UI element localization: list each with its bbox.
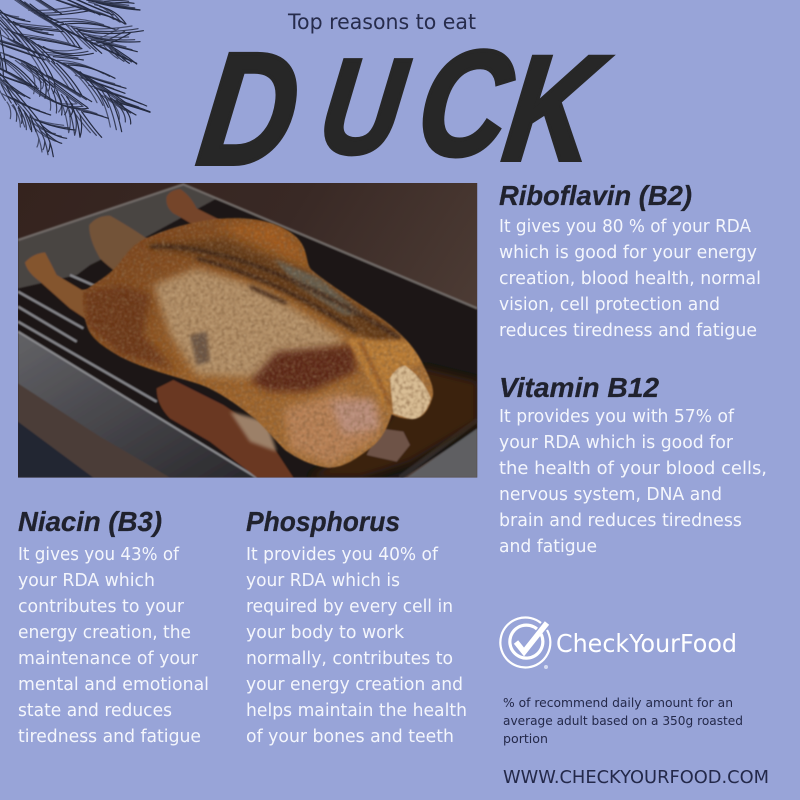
footnote: average adult based on a 350g roasted bbox=[503, 713, 743, 728]
footnote: portion bbox=[503, 731, 548, 746]
text block: energy creation, the bbox=[18, 623, 191, 643]
website url: WWW.CHECKYOURFOOD.COM bbox=[503, 767, 769, 788]
text block: creation, blood health, normal bbox=[499, 269, 761, 289]
text block: of your bones and teeth bbox=[246, 727, 454, 747]
title: DUCK: C bbox=[409, 20, 523, 188]
lower leg bbox=[157, 380, 293, 478]
text block: which is good for your energy bbox=[499, 243, 757, 263]
text block: your RDA which is bbox=[246, 571, 400, 591]
panel: Phosphorus bbox=[246, 506, 467, 747]
text block bbox=[246, 545, 467, 747]
text block: tiredness and fatigue bbox=[18, 727, 201, 747]
roasting tray bbox=[18, 184, 477, 478]
photo: roast duck in tray bbox=[18, 183, 477, 478]
text block: required by every cell in bbox=[246, 597, 453, 617]
heading: Riboflavin (B2) bbox=[499, 180, 692, 211]
text block: contributes to your bbox=[18, 597, 185, 617]
text block: normally, contributes to bbox=[246, 649, 453, 669]
wing left bbox=[89, 216, 147, 275]
text block: your body to work bbox=[246, 623, 405, 643]
text block: vision, cell protection and bbox=[499, 295, 720, 315]
duck body bbox=[77, 215, 440, 475]
text block bbox=[499, 407, 767, 557]
text block: It gives you 43% of bbox=[18, 545, 180, 565]
brand name: CheckYourFood bbox=[556, 629, 737, 658]
footnote bbox=[503, 695, 743, 746]
text block: your RDA which bbox=[18, 571, 155, 591]
heading: Vitamin B12 bbox=[499, 372, 659, 403]
rack bars bbox=[18, 275, 157, 402]
text block: reduces tiredness and fatigue bbox=[499, 321, 757, 341]
text block: brain and reduces tiredness bbox=[499, 511, 742, 531]
decoration: rosemary sprig bbox=[0, 0, 150, 157]
text block: your energy creation and bbox=[246, 675, 463, 695]
text block: helps maintain the health bbox=[246, 701, 467, 721]
text block: the health of your blood cells, bbox=[499, 459, 767, 479]
text block: mental and emotional bbox=[18, 675, 209, 695]
text block: your RDA which is good for bbox=[499, 433, 734, 453]
text block bbox=[499, 217, 761, 341]
title: DUCK: D bbox=[190, 20, 310, 199]
subtitle: Top reasons to eat bbox=[287, 10, 476, 34]
panel: Vitamin B12 bbox=[499, 372, 767, 557]
text block bbox=[18, 545, 209, 747]
panel: Niacin (B3) bbox=[18, 506, 209, 747]
heading: Niacin (B3) bbox=[18, 506, 162, 537]
heading: Phosphorus bbox=[246, 506, 400, 537]
footnote: % of recommend daily amount for an bbox=[503, 695, 733, 710]
panel: Riboflavin (B2) bbox=[499, 180, 761, 341]
title: DUCK: U bbox=[312, 32, 416, 182]
text block: and fatigue bbox=[499, 537, 597, 557]
drumstick left bbox=[24, 252, 88, 320]
text block: It provides you 40% of bbox=[246, 545, 439, 565]
text block: It gives you 80 % of your RDA bbox=[499, 217, 751, 237]
text block: maintenance of your bbox=[18, 649, 199, 669]
icon: check circle bbox=[500, 617, 550, 667]
text block: state and reduces bbox=[18, 701, 172, 721]
logo: CheckYourFood bbox=[500, 617, 737, 669]
top leg bbox=[166, 188, 220, 224]
text block: It provides you with 57% of bbox=[499, 407, 735, 427]
text block: nervous system, DNA and bbox=[499, 485, 722, 505]
title: DUCK: K bbox=[496, 25, 615, 193]
wood table background bbox=[18, 183, 477, 478]
